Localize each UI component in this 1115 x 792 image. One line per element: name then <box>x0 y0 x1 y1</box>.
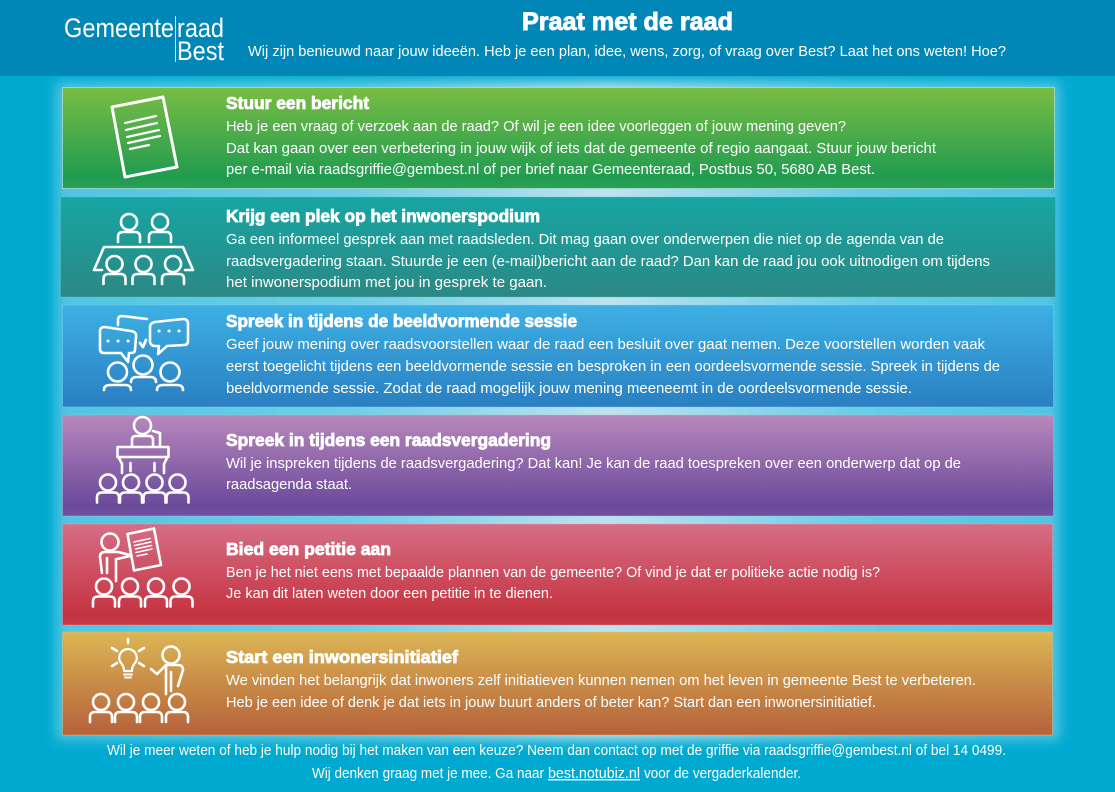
panel: Bied een petitie aan <box>62 524 1052 625</box>
footer text: voor de vergaderkalender. <box>644 766 801 782</box>
subtitle: Wij zijn benieuwd naar jouw ideeën. Heb je een plan, idee, wens, zorg, of vraag over Best? Laat het ons weten! Hoe? <box>248 44 1006 60</box>
body text <box>226 119 936 178</box>
footer text: Wij denken graag met je mee. Ga naar <box>312 766 544 782</box>
icon: speaker at lectern <box>97 417 188 502</box>
footer text <box>107 743 1006 782</box>
body text: Geef jouw mening over raadsvoorstellen waar de raad een besluit over gaat nemen. Deze voorstellen worden vaak <box>226 337 986 353</box>
body text: Wil je inspreken tijdens de raadsvergadering? Dat kan! Je kan de raad toespreken over een onderwerp dat op de <box>226 456 961 472</box>
body text <box>226 456 961 493</box>
body text: per e-mail via raadsgriffie@gembest.nl of per brief naar Gemeenteraad, Postbus 50, 5680 AB Best. <box>226 162 875 178</box>
body text: Heb je een vraag of verzoek aan de raad? Of wil je een idee voorleggen of jouw mening geven? <box>226 119 846 135</box>
icon: idea light bulb with presenter <box>90 639 188 722</box>
body text <box>226 232 990 291</box>
logo: Gemeenteraad Best: Best <box>177 36 224 66</box>
body text: raadsvergadering staan. Stuurde je een (e-mail)bericht aan de raad? Dan kan de raad jou ook uitnodigen om tijdens <box>226 254 990 270</box>
body text: Ben je het niet eens met bepaalde plannen van de gemeente? Of vind je dat er politieke actie nodig is? <box>226 565 880 581</box>
footer text: best.notubiz.nl <box>548 766 640 782</box>
heading: Bied een petitie aan <box>226 539 391 559</box>
panel: Stuur een bericht <box>62 88 1054 188</box>
glow behind panels <box>56 82 1060 740</box>
body text <box>226 565 880 602</box>
body text <box>226 337 1000 397</box>
title: Praat met de raad <box>522 8 733 36</box>
icon: people at a table <box>94 214 193 284</box>
body text: Je kan dit laten weten door een petitie in te dienen. <box>226 586 553 602</box>
panel: Spreek in tijdens een raadsvergadering <box>62 415 1054 516</box>
panel: Start een inwonersinitiatief <box>62 632 1052 735</box>
body text: raadsagenda staat. <box>226 477 352 493</box>
footer text: Wil je meer weten of heb je hulp nodig bij het maken van een keuze? Neem dan contact op met de griffie via raadsgriffie@gembest.nl of bel 14 0499. <box>107 743 1006 759</box>
logo: Gemeenteraad Best: raad <box>177 13 224 43</box>
header band <box>0 0 1115 76</box>
body text: Dat kan gaan over een verbetering in jouw wijk of iets dat de gemeente of regio aangaat. Stuur jouw bericht <box>226 141 936 157</box>
body text <box>226 673 976 711</box>
body text: Heb je een idee of denk je dat iets in jouw buurt anders of beter kan? Start dan een inwonersinitiatief. <box>226 695 876 711</box>
icon: presenter with petition <box>93 528 192 606</box>
logo: Gemeenteraad Best <box>64 13 224 66</box>
heading: Krijg een plek op het inwonerspodium <box>226 206 540 226</box>
body text: beeldvormende sessie. Zodat de raad mogelijk jouw mening meeneemt in de oordeelsvormende sessie. <box>226 381 912 397</box>
icon: speech bubbles and people <box>100 316 188 390</box>
body text: Ga een informeel gesprek aan met raadsleden. Dit mag gaan over onderwerpen die niet op de agenda van de <box>226 232 944 248</box>
body text: eerst toegelicht tijdens een beeldvormende sessie en besproken in een oordeelsvormende sessie. Spreek in tijdens de <box>226 359 1000 375</box>
heading: Stuur een bericht <box>226 93 369 113</box>
body text: het inwonerspodium met jou in gesprek te gaan. <box>226 275 547 291</box>
panel: Krijg een plek op het inwonerspodium <box>60 197 1056 297</box>
heading: Spreek in tijdens een raadsvergadering <box>226 430 551 450</box>
heading: Spreek in tijdens de beeldvormende sessie <box>226 311 577 331</box>
panel: Spreek in tijdens de beeldvormende sessie <box>62 305 1054 407</box>
body text: We vinden het belangrijk dat inwoners zelf initiatieven kunnen nemen om het leven in gemeente Best te verbeteren. <box>226 673 976 689</box>
icon: document <box>112 97 177 177</box>
heading: Start een inwonersinitiatief <box>226 647 458 667</box>
logo: Gemeenteraad Best: Gemeente <box>64 13 174 43</box>
